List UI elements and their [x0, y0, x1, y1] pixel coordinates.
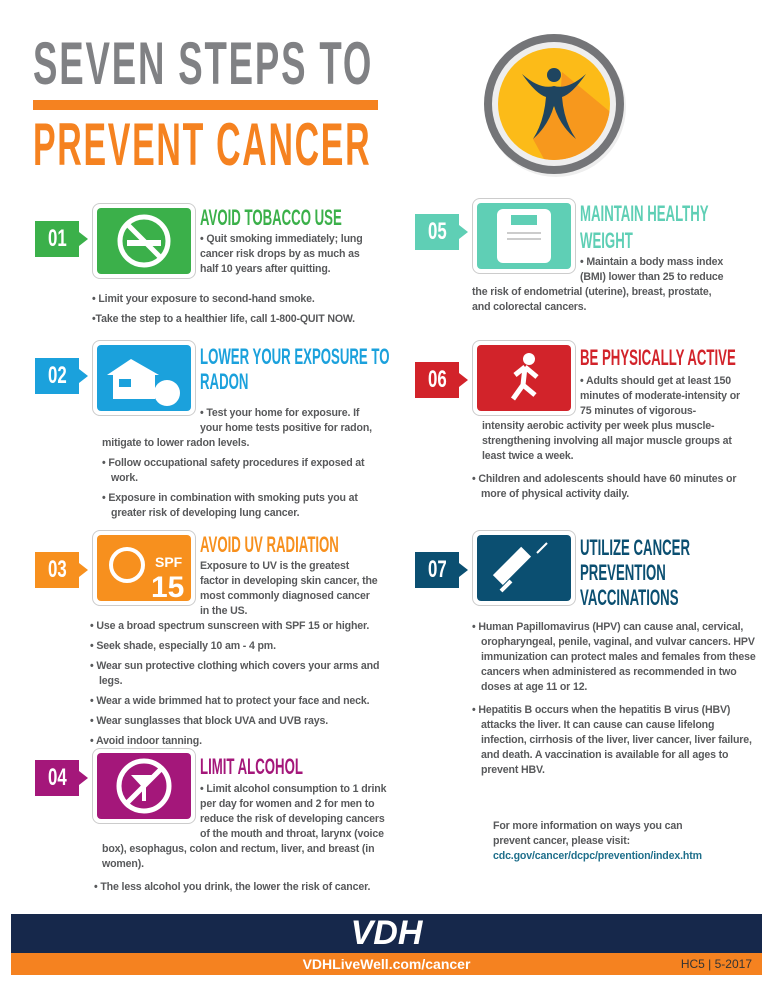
text: • Human Papillomavirus (HPV) can cause anal, cervical, oropharyngeal, penile, vaginal, and vulvar cancers. HPV immunization can protect males and females from these cancers when administered as recommended in two doses at age 11 or 12. — [472, 621, 756, 693]
step 04: 04 — [48, 764, 66, 791]
icon: scale — [472, 198, 576, 274]
text: • Limit alcohol consumption to 1 drink per day for women and 2 for men to reduce the risk of developing cancers of the mouth and throat, larynx (voice — [200, 783, 386, 840]
title — [33, 30, 378, 178]
step 07: 07 — [428, 556, 446, 583]
heading: BE PHYSICALLY ACTIVE — [580, 345, 736, 370]
step 03: • Wear a wide brimmed hat to protect your face and neck. — [90, 695, 369, 707]
heading — [580, 201, 709, 253]
heading: LIMIT ALCOHOL — [200, 754, 303, 779]
step 06 — [415, 340, 740, 500]
step 02: • Exposure in combination with smoking puts you at greater risk of developing lung cancer. — [102, 492, 358, 519]
text — [472, 621, 756, 776]
number badge 01: 01 — [48, 225, 66, 252]
number badge 01 — [35, 221, 79, 257]
footer — [11, 914, 762, 975]
VDH logo: VDH — [351, 914, 422, 952]
icon: house radon — [92, 340, 196, 416]
step 06: intensity aerobic activity per week plus muscle-strengthening involving all major muscle groups at least twice a week. — [482, 420, 732, 462]
step 03: • Use a broad spectrum sunscreen with SPF 15 or higher. — [90, 620, 369, 632]
more info: For more information on ways you can prevent cancer, please visit: — [493, 820, 682, 847]
heading — [580, 535, 690, 610]
icon: syringe — [472, 530, 576, 606]
icon: runner — [472, 340, 576, 416]
step 01: •Take the step to a healthier life, call 1-800-QUIT NOW. — [92, 313, 355, 325]
step 02: 02 — [48, 362, 66, 389]
heading: UTILIZE CANCER — [580, 535, 690, 560]
heading: WEIGHT — [580, 228, 633, 253]
step 04: • The less alcohol you drink, the lower the risk of cancer. — [94, 881, 370, 893]
step 01: • Limit your exposure to second-hand smoke. — [92, 293, 315, 305]
icon: sun SPF 15: SPF — [155, 554, 183, 570]
step 05: the risk of endometrial (uterine), breast, prostate, and colorectal cancers. — [472, 286, 711, 313]
step 02 — [35, 340, 389, 519]
heading — [200, 344, 389, 394]
text: Exposure to UV is the greatest factor in developing skin cancer, the most commonly diagnosed cancer in the US. — [200, 560, 378, 617]
heading: RADON — [200, 369, 248, 394]
step 03: • Avoid indoor tanning. — [90, 735, 202, 747]
title: PREVENT CANCER — [33, 111, 371, 178]
heading: PREVENTION — [580, 560, 666, 585]
step 05 — [415, 198, 724, 313]
text: • Maintain a body mass index (BMI) lower than 25 to reduce — [580, 256, 723, 283]
step 07 — [415, 530, 756, 776]
step 05: 05 — [428, 218, 446, 245]
step 04: box), esophagus, colon and rectum, liver, and breast (in women). — [102, 843, 374, 870]
heading: LOWER YOUR EXPOSURE TO — [200, 344, 389, 369]
heading: MAINTAIN HEALTHY — [580, 201, 709, 226]
heading: AVOID UV RADIATION — [200, 532, 339, 557]
text: • Test your home for exposure. If your home tests positive for radon, — [200, 407, 372, 434]
more info: cdc.gov/cancer/dcpc/prevention/index.htm — [493, 850, 702, 862]
step 04 — [35, 748, 386, 893]
icon: no smoking — [92, 203, 196, 279]
url bar: HC5 | 5-2017 — [681, 957, 752, 971]
text: • Hepatitis B occurs when the hepatitis B virus (HBV) attacks the liver. It can cause can cause lifelong infection, cirrhosis of the liver, liver cancer, liver failure, and death. A vaccination is available for all ages to prevent HBV. — [472, 704, 752, 776]
step 06: 06 — [428, 366, 446, 393]
VDH logo — [11, 914, 762, 953]
icon: sun SPF 15 — [92, 530, 196, 606]
url bar — [11, 953, 762, 975]
heading: AVOID TOBACCO USE — [200, 205, 342, 230]
text: • Adults should get at least 150 minutes of moderate-intensity or 75 minutes of vigorous- — [580, 375, 740, 417]
step 02: mitigate to lower radon levels. — [102, 437, 249, 449]
url bar: VDHLiveWell.com/cancer — [303, 956, 470, 972]
step 01 — [35, 203, 363, 325]
step 03: 03 — [48, 556, 66, 583]
heading: VACCINATIONS — [580, 585, 679, 610]
step 03: • Seek shade, especially 10 am - 4 pm. — [90, 640, 276, 652]
step 06: • Children and adolescents should have 60 minutes or more of physical activity daily. — [472, 473, 736, 500]
step 03: • Wear sun protective clothing which covers your arms and legs. — [90, 660, 379, 687]
step 03 — [35, 530, 379, 747]
icon: no alcohol — [92, 748, 196, 824]
text: • Quit smoking immediately; lung cancer risk drops by as much as half 10 years after quitting. — [200, 233, 363, 275]
icon: person medallion — [484, 34, 626, 177]
more info — [493, 820, 702, 862]
step 03: • Wear sunglasses that block UVA and UVB rays. — [90, 715, 328, 727]
step 02: • Follow occupational safety procedures if exposed at work. — [102, 457, 364, 484]
title: SEVEN STEPS TO — [33, 30, 373, 97]
